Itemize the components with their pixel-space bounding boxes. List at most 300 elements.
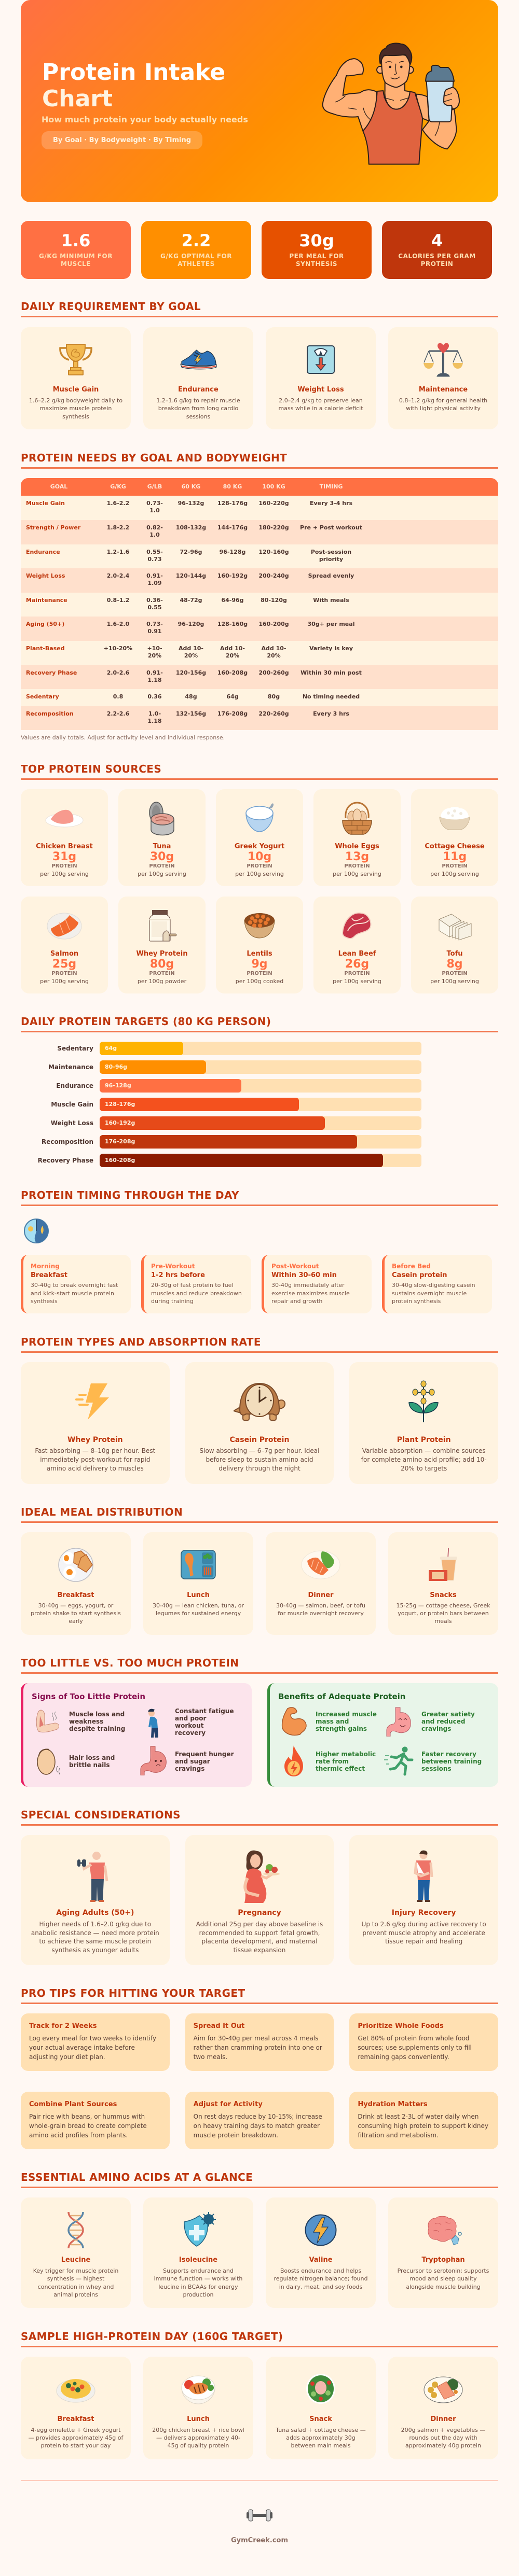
item text: sessions [421, 1765, 452, 1772]
heading: too little vs too much: TOO LITTLE VS. TOO MUCH PROTEIN [21, 1657, 239, 1669]
row: plant-based: Plant-Based [26, 645, 65, 652]
title: Lunch [187, 2415, 210, 2423]
description: protein to start your day [41, 2442, 111, 2449]
icon: happy stomach [384, 1705, 415, 1737]
icon: balance scale with heart [424, 343, 463, 376]
title: Aging Adults (50+) [56, 1909, 134, 1917]
tip text: Aim for 30-40g per meal across 4 meals [194, 2035, 318, 2042]
description: in dairy, meat, and soy foods [279, 2284, 362, 2290]
icon: yogurt bowl with spoon [245, 803, 274, 832]
row: strength: 108-132g [176, 524, 206, 531]
row: plant-based: Variety is key [309, 645, 353, 652]
row: plant-based: 20% [226, 652, 239, 659]
title: Pregnancy [238, 1909, 281, 1917]
icon: egg basket [342, 802, 372, 835]
tip title: Spread It Out [194, 2022, 244, 2030]
description: 0.8–1.2 g/kg for general health [399, 397, 487, 404]
icon: flame [278, 1745, 309, 1776]
tip text: amino acid profiles from plants. [29, 2132, 128, 2139]
footer brand text: GymCreek.com [231, 2537, 288, 2544]
icon: clock tortoise [234, 1383, 285, 1421]
item text: weakness [69, 1718, 103, 1725]
time label: Morning [31, 1263, 60, 1270]
label [160, 253, 232, 268]
icon: runner [384, 1745, 415, 1776]
tip text: Get 80% of protein from whole food [358, 2035, 469, 2042]
heading: special considerations: SPECIAL CONSIDERATIONS [21, 1809, 181, 1821]
description: alongside muscle building [406, 2284, 481, 2290]
row: aging: Aging (50+) [26, 621, 64, 627]
description: animal proteins [53, 2291, 98, 2298]
label: G/KG OPTIMAL FOR [160, 253, 232, 260]
row: plant-based: 20% [184, 652, 198, 659]
heading: sample high-protein day [21, 2329, 498, 2347]
food card: whole eggs [313, 789, 401, 886]
timing card: morning [21, 1255, 131, 1313]
icon: cottage cheese bowl [439, 807, 470, 830]
row: endurance [21, 544, 498, 568]
description: mass while in a calorie deficit [278, 405, 363, 412]
card: sample dinner [388, 2357, 498, 2459]
row: muscle gain: Muscle Gain [26, 500, 65, 507]
item text: cravings [175, 1765, 204, 1772]
description [143, 2426, 253, 2449]
tip text [358, 2034, 472, 2062]
description: — provides approximately 45g of [29, 2434, 123, 2441]
description: early [69, 1618, 83, 1624]
icon: tuna can [149, 802, 174, 836]
tip: hydration matters [349, 2092, 498, 2149]
panel heading: Signs of Too Little Protein [32, 1692, 145, 1701]
heading: pro tips: PRO TIPS FOR HITTING YOUR TARGET [21, 1987, 245, 1999]
description: 30-40g immediately after [271, 1282, 345, 1289]
label: G/KG MINIMUM FOR [39, 253, 113, 260]
row: maintenance: 0.55 [147, 604, 162, 611]
row: maintenance: With meals [313, 597, 349, 604]
description: Slow absorbing — 6–7g per hour. Ideal [200, 1447, 319, 1454]
row: recovery phase: 120-156g [176, 669, 206, 676]
description: Boosts endurance and helps [280, 2267, 361, 2274]
row: maintenance: 64-96g [221, 597, 244, 604]
number: 30g [299, 231, 334, 250]
item text: Higher metabolic [316, 1751, 376, 1758]
item text: and sugar [175, 1758, 210, 1765]
description [388, 2426, 498, 2449]
row: endurance: Endurance [26, 549, 60, 555]
name: Lentils [247, 950, 272, 958]
card: aging adults [21, 1835, 170, 1965]
description [349, 1447, 498, 1473]
title: Dinner [308, 1591, 333, 1599]
description [21, 2426, 131, 2449]
protein grams: 80g [150, 958, 174, 971]
tip text: consuming high protein to support kidney [358, 2122, 488, 2130]
tip: adjust for activity [185, 2092, 334, 2149]
bar label: Weight Loss [51, 1119, 93, 1127]
label [289, 253, 344, 268]
item text [175, 1707, 234, 1736]
name: Lean Beef [338, 950, 376, 958]
item text [69, 1711, 125, 1732]
title [42, 59, 225, 112]
item text: brittle nails [69, 1761, 110, 1768]
table header: 80 KG [223, 483, 242, 490]
serving: per 100g powder [138, 978, 186, 985]
row: weight loss: 120-144g [176, 572, 206, 579]
row: plant-based: Add 10- [220, 645, 245, 652]
hero banner [21, 0, 498, 202]
description: mood and sleep quality [409, 2275, 477, 2282]
row: recovery phase: 0.91- [146, 669, 163, 676]
card: breakfast [21, 1532, 131, 1635]
protein grams: 25g [52, 958, 76, 971]
description: 2.0–2.4 g/kg to preserve lean [279, 397, 363, 404]
card: whey protein [21, 1362, 170, 1484]
description: Tuna salad + cottage cheese — [276, 2427, 366, 2433]
row: plant-based: 20% [267, 652, 281, 659]
protein grams: 10g [248, 850, 271, 863]
description: maximize muscle protein [40, 405, 112, 412]
tip text: filtration and metabolism. [358, 2132, 439, 2139]
description [266, 2267, 376, 2291]
description: immediately post-workout for rapid [40, 1456, 150, 1463]
description: immune function — works with [154, 2275, 242, 2282]
name: Greek Yogurt [235, 843, 284, 850]
bar: sedentary [57, 1042, 421, 1055]
row: sedentary [21, 689, 498, 706]
heading: protein needs: PROTEIN NEEDS BY GOAL AND BODYWEIGHT [21, 452, 287, 464]
row: recovery phase: 2.0-2.6 [107, 669, 129, 676]
row: recovery phase: 200-260g [258, 669, 289, 676]
description: 200g salmon + vegetables — [401, 2427, 485, 2433]
food card: greek yogurt [216, 789, 303, 886]
description [156, 397, 240, 420]
description: regulate nitrogen balance; found [274, 2275, 367, 2282]
item text: Hair loss and [69, 1754, 115, 1761]
table: protein needs by goal and bodyweight [21, 478, 498, 730]
row: recomposition [21, 706, 498, 730]
row: aging [21, 617, 498, 641]
protein grams: 13g [345, 850, 369, 863]
description: to achieve the same muscle protein [39, 1938, 151, 1945]
panel: signs of too little protein [21, 1683, 252, 1787]
item text: strength gains [316, 1725, 367, 1732]
table header: G/LB [147, 483, 162, 490]
description: tissue expansion [234, 1947, 285, 1954]
time label: Post-Workout [271, 1263, 319, 1270]
heading: essential amino acids: ESSENTIAL AMINO ACIDS AT A GLANCE [21, 2171, 253, 2183]
row: sedentary: 0.8 [113, 693, 123, 700]
row: strength: 0.82- [146, 524, 163, 531]
serving: per 100g serving [333, 978, 381, 985]
row: weight loss: 200-240g [258, 572, 289, 579]
icon: lentil bowl [244, 913, 275, 939]
description: concentration in whey and [38, 2284, 114, 2290]
description: protein shake to start synthesis [31, 1609, 121, 1617]
icon: tuna salad plate [300, 2369, 342, 2411]
heading: daily protein targets [21, 1014, 498, 1032]
label [398, 253, 476, 268]
description [143, 1601, 253, 1617]
heading: protein types: PROTEIN TYPES AND ABSORPTION RATE [21, 1336, 261, 1348]
tip text [194, 2034, 322, 2062]
tip title: Combine Plant Sources [29, 2101, 117, 2108]
row: muscle gain: 1.6-2.2 [107, 500, 129, 507]
title: Whey Protein [67, 1436, 123, 1444]
row: aging: 96-120g [178, 621, 204, 627]
row: recomposition: Every 3 hrs [313, 710, 349, 717]
description: repair and growth [271, 1298, 322, 1305]
row: plant-based: Add 10- [179, 645, 203, 652]
name: Tuna [153, 843, 171, 850]
description [21, 1920, 170, 1954]
description: 15-25g — cottage cheese, Greek [396, 1602, 490, 1608]
icon: lunch tray [177, 1544, 219, 1586]
name: Chicken Breast [36, 843, 93, 850]
bar: muscle gain [51, 1098, 421, 1111]
item text: and poor [175, 1714, 206, 1721]
description: meals [434, 1618, 452, 1624]
row: strength: Pre + Post workout [300, 524, 362, 531]
row: strength: 144-176g [217, 524, 248, 531]
table header: G/KG [110, 483, 126, 490]
tip text [358, 2112, 488, 2140]
description: for muscle overnight recovery [278, 1609, 364, 1617]
row: aging: 0.73- [146, 621, 163, 627]
description: amino acid delivery to muscles [47, 1465, 144, 1472]
row: strength: 1.0 [149, 531, 160, 538]
protein grams: 11g [443, 850, 467, 863]
row: endurance: 96-128g [220, 549, 245, 555]
row: recomposition: 2.2-2.6 [107, 710, 129, 717]
description [31, 1282, 118, 1305]
timing card: pre-workout [141, 1255, 251, 1313]
row: weight loss [21, 568, 498, 593]
label: SYNTHESIS [296, 260, 337, 268]
item text: cravings [421, 1725, 451, 1732]
icon: older adult lifting dumbbell [66, 1847, 124, 1904]
description [266, 2426, 376, 2449]
tip title: Adjust for Activity [194, 2101, 263, 2108]
bar label: Recovery Phase [38, 1157, 93, 1164]
bar label: Recomposition [42, 1138, 93, 1145]
food card: salmon [21, 897, 108, 993]
food card: tuna [118, 789, 206, 886]
card: endurance [143, 327, 253, 429]
table header: TIMING [320, 483, 343, 490]
item text: Frequent hunger [175, 1751, 234, 1758]
description: production [183, 2291, 214, 2298]
item text: and reduced [421, 1718, 465, 1725]
tip title: Hydration Matters [358, 2101, 428, 2108]
bar track and fill: 128-176g [105, 1101, 135, 1108]
card: muscle gain [21, 327, 131, 429]
title: Snack [309, 2415, 332, 2423]
title: Injury Recovery [392, 1909, 456, 1917]
heading: protein types [21, 1335, 498, 1353]
food card: lean beef [313, 897, 401, 993]
description: and kick-start muscle protein [31, 1290, 114, 1296]
description: Supports endurance and [163, 2267, 234, 2274]
icon: pregnant woman with food [231, 1847, 288, 1904]
bar: maintenance [48, 1060, 421, 1074]
row: aging: 0.91 [147, 628, 162, 635]
stat: 1.6 g/kg [21, 221, 131, 279]
description: 1.6–2.2 g/kg bodyweight daily to [29, 397, 122, 404]
title: Muscle Gain [53, 386, 99, 394]
food card: cottage cheese [411, 789, 498, 886]
description [21, 1601, 131, 1625]
icon: weak arm [32, 1705, 63, 1737]
row: plant-based: 20% [148, 652, 161, 659]
row: plant-based [21, 641, 498, 665]
icon: hero athlete flexing with shaker [322, 43, 460, 165]
title: Snacks [430, 1591, 457, 1599]
heading: daily requirement by goal [21, 299, 498, 317]
heading: too little vs too much [21, 1656, 498, 1674]
protein label: PROTEIN [247, 863, 272, 869]
description: Precursor to serotonin; supports [398, 2267, 489, 2274]
protein grams: 30g [150, 850, 174, 863]
description: yogurt, or protein bars between [398, 1609, 489, 1617]
row: recovery phase: 160-208g [217, 669, 248, 676]
name: Whey Protein [136, 950, 188, 958]
item text [421, 1711, 475, 1732]
icon: person with arm sling [395, 1847, 452, 1904]
row: recovery phase: Within 30 min post [301, 669, 362, 676]
row: sedentary: 80g [268, 693, 280, 700]
bar label: Muscle Gain [51, 1101, 93, 1108]
description: delivery through the night [218, 1465, 301, 1472]
tip: combine plant sources [21, 2092, 170, 2149]
tip text: Log every meal for two weeks to identify [29, 2035, 156, 2042]
title: Breakfast [58, 1591, 94, 1599]
card: casein protein [185, 1362, 334, 1484]
bar track and fill [100, 1079, 421, 1093]
label: ATHLETES [177, 260, 215, 268]
icon: shake and protein bar [422, 1544, 464, 1586]
protein label: PROTEIN [247, 971, 272, 976]
tip: spread it out [185, 2013, 334, 2071]
title: Breakfast [58, 2415, 94, 2423]
description: sessions [186, 413, 210, 420]
description: tissue repair and healing [385, 1938, 462, 1945]
icon: plant with molecule [398, 1376, 449, 1427]
icon: hair loss head [32, 1745, 63, 1776]
description: Variable absorption — combine sources [362, 1447, 485, 1454]
protein grams: 26g [345, 958, 369, 971]
row: recomposition: 220-260g [258, 710, 289, 717]
icon: salmon and greens plate [300, 1544, 342, 1586]
description [185, 1920, 334, 1954]
bar track and fill: 176-208g [105, 1138, 135, 1145]
protein label: PROTEIN [442, 971, 468, 976]
bar track and fill: 160-192g [105, 1119, 135, 1126]
title: Maintenance [419, 386, 468, 394]
icon: bathroom scale [307, 345, 335, 374]
item text: recovery [175, 1729, 206, 1736]
row: plant-based: +10-20% [104, 645, 132, 652]
item text: rate from [316, 1758, 349, 1765]
row: plant-based: Add 10- [262, 645, 286, 652]
item text: mass and [316, 1718, 349, 1725]
icon: whey jar and scoop [149, 910, 176, 942]
row: sedentary: Sedentary [26, 693, 59, 700]
description: anabolic resistance — need more protein [31, 1929, 159, 1937]
description: for complete amino acid profile; add 10- [361, 1456, 487, 1463]
item text: Faster recovery [421, 1751, 476, 1758]
title: Lunch [187, 1591, 210, 1599]
description [266, 1601, 376, 1617]
row: sedentary: 48g [185, 693, 197, 700]
description: muscles and reduce breakdown [151, 1290, 242, 1296]
icon: running shoe [180, 349, 217, 369]
description [35, 1447, 156, 1472]
icon: sliced tofu [439, 914, 471, 941]
protein label: PROTEIN [344, 971, 370, 976]
item text: Increased muscle [316, 1711, 377, 1718]
protein grams: 31g [52, 850, 76, 863]
item text: between training [421, 1758, 482, 1765]
row: muscle gain [21, 496, 498, 520]
card: sample lunch [143, 2357, 253, 2459]
title: Dinner [431, 2415, 456, 2423]
card: leucine [21, 2197, 131, 2308]
tip text: remaining gaps conveniently. [358, 2053, 449, 2061]
description: between main meals [291, 2442, 351, 2449]
food card: whey protein [118, 897, 206, 993]
title: Chart [42, 86, 113, 112]
card: valine [266, 2197, 376, 2308]
title: Plant Protein [397, 1436, 451, 1444]
description: synthesis — highest [47, 2275, 104, 2282]
heading: protein timing: PROTEIN TIMING THROUGH THE DAY [21, 1189, 239, 1201]
card: snacks [388, 1532, 498, 1635]
item text: Constant fatigue [175, 1707, 234, 1714]
description: 200g chicken breast + rice bowl [152, 2427, 244, 2433]
icon: lightning bolt [75, 1383, 109, 1420]
row: muscle gain: Every 3-4 hrs [310, 500, 352, 507]
row: recomposition: 1.18 [147, 718, 162, 724]
tip text: Pair rice with beans, or hummus with [29, 2113, 145, 2120]
pill: navigation tags [42, 131, 202, 149]
description: 1.2–1.6 g/kg to repair muscle [156, 397, 240, 404]
tip text: on heavy training days to match greater [194, 2122, 320, 2130]
description: 30-40g slow-digesting casein [392, 1282, 475, 1289]
label: PER MEAL FOR [289, 253, 344, 260]
description [151, 1282, 242, 1305]
icon: trophy [59, 344, 92, 375]
tip text: Drink at least 2-3L of water daily when [358, 2113, 479, 2120]
recommendation: Breakfast [31, 1271, 67, 1279]
description: Key trigger for muscle protein [33, 2267, 118, 2274]
icon: salmon and vegetables plate [422, 2369, 464, 2411]
footer divider [21, 2480, 498, 2481]
description: legumes for sustained energy [156, 1609, 241, 1617]
description: 30-40g to break overnight fast [31, 1282, 118, 1289]
description [278, 397, 363, 412]
row: plant-based: +10- [147, 645, 162, 652]
heading: protein timing [21, 1188, 498, 1206]
panel: benefits of adequate protein [267, 1683, 498, 1787]
description: protein synthesis [392, 1298, 441, 1305]
row: recomposition: Recomposition [26, 710, 74, 717]
row: muscle gain: 0.73- [146, 500, 163, 507]
label: CALORIES PER GRAM [398, 253, 476, 260]
table header: 60 KG [182, 483, 200, 490]
description: Up to 2.6 g/kg during active recovery to [362, 1921, 486, 1928]
row: endurance: 1.2-1.6 [107, 549, 129, 555]
